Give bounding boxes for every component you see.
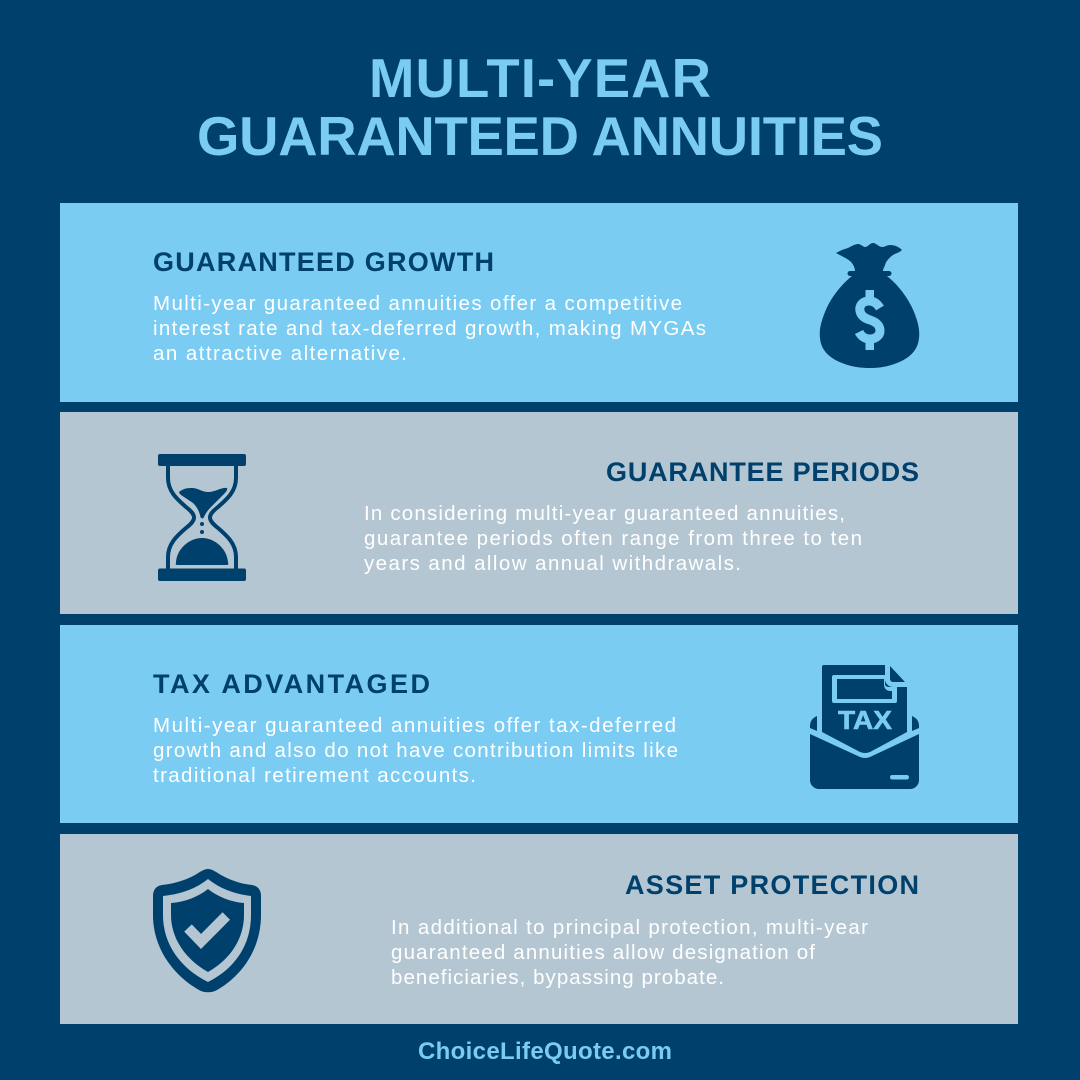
footer website: ChoiceLifeQuote.com: [418, 1038, 672, 1065]
icon: tax envelope: [810, 665, 919, 789]
text: guaranteed growth: interest rate and tax-deferred growth, making MYGAs: [153, 317, 706, 340]
text: asset protection: In additional to principal protection, multi-year: [391, 916, 868, 939]
panel: guarantee periods: [60, 412, 1018, 614]
text: guaranteed growth: Multi-year guaranteed annuities offer a competitive: [153, 292, 682, 315]
text: guarantee periods: In considering multi-year guaranteed annuities,: [364, 502, 845, 525]
text: guarantee periods: [364, 502, 862, 575]
heading: asset protection: ASSET PROTECTION: [625, 870, 919, 900]
title: GUARANTEED ANNUITIES: [197, 106, 883, 167]
panel: tax advantaged: [60, 625, 1018, 823]
panel: asset protection: [60, 834, 1018, 1024]
text: guarantee periods: years and allow annual withdrawals.: [364, 552, 741, 575]
text: tax advantaged: Multi-year guaranteed annuities offer tax-deferred: [153, 714, 676, 737]
text: tax advantaged: traditional retirement accounts.: [153, 764, 476, 787]
icon: hourglass: [158, 454, 246, 581]
icon: tax envelope: TAX: [838, 705, 893, 735]
heading: guaranteed growth: GUARANTEED GROWTH: [153, 247, 494, 277]
text: guarantee periods: guarantee periods often range from three to ten: [364, 527, 862, 550]
panel: guaranteed growth: [60, 203, 1018, 402]
icon: shield: [153, 869, 261, 992]
heading: tax advantaged: TAX ADVANTAGED: [153, 669, 430, 699]
heading: guarantee periods: GUARANTEE PERIODS: [606, 457, 919, 487]
text: asset protection: guaranteed annuities allow designation of: [391, 941, 815, 964]
text: asset protection: beneficiaries, bypassing probate.: [391, 966, 724, 989]
icon: money bag: [820, 243, 919, 368]
text: asset protection: [391, 916, 868, 989]
title: MULTI-YEAR: [369, 48, 711, 109]
text: tax advantaged: growth and also do not have contribution limits like: [153, 739, 678, 762]
title: [197, 48, 883, 167]
text: guaranteed growth: [153, 292, 706, 365]
text: guaranteed growth: an attractive alternative.: [153, 342, 407, 365]
text: tax advantaged: [153, 714, 678, 787]
